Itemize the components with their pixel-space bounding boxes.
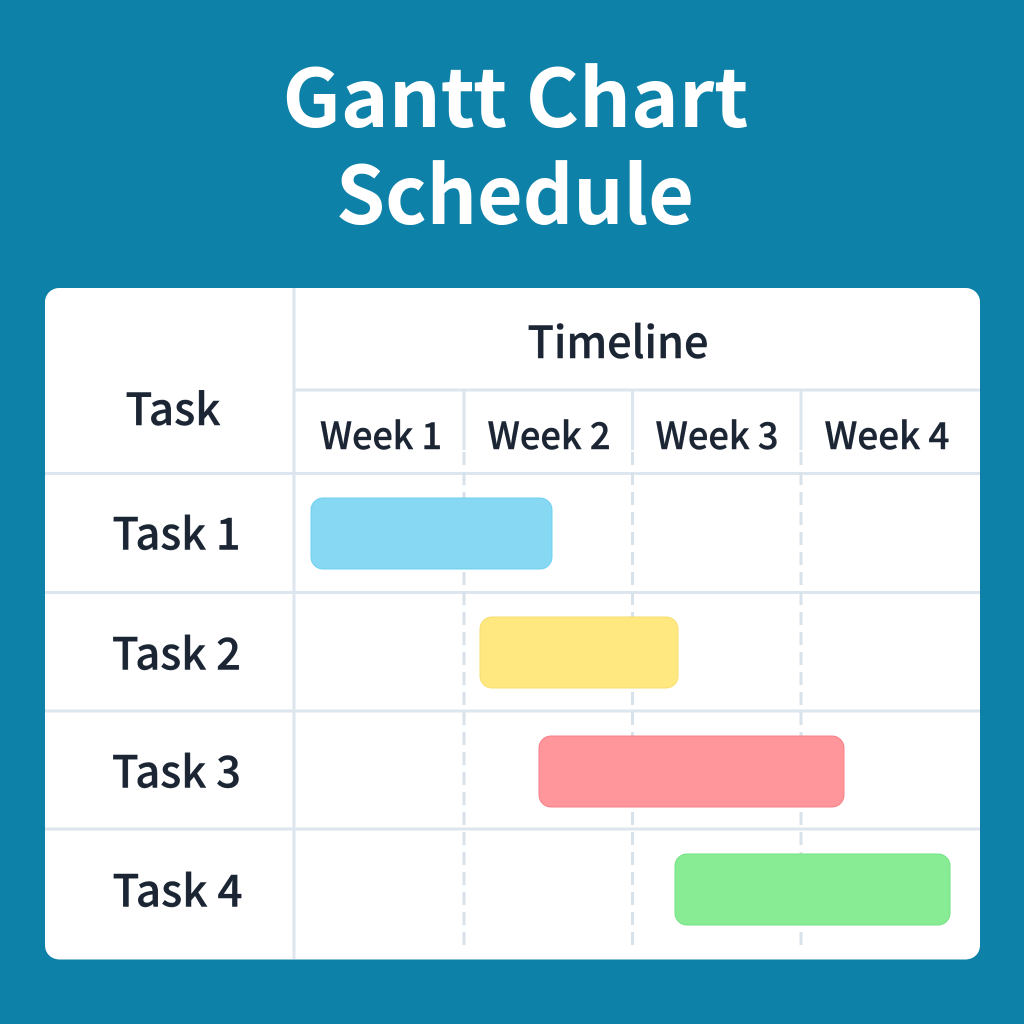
- week labels: Week 4: [824, 406, 950, 460]
- panel: gantt table: [45, 288, 980, 960]
- bar: task 1: [311, 498, 552, 569]
- task labels: Task 2: [112, 618, 241, 682]
- task labels: Task 4: [112, 856, 242, 920]
- title: Schedule: [336, 132, 694, 248]
- bar: task 4: [675, 854, 950, 925]
- bar: task 3: [539, 736, 844, 807]
- task labels: Task 1: [112, 498, 240, 562]
- task labels: [112, 498, 242, 920]
- week labels: Week 3: [656, 406, 778, 460]
- task labels: Task 3: [112, 736, 241, 800]
- title: [282, 35, 748, 248]
- bar: task 2: [480, 617, 678, 688]
- week labels: [320, 406, 950, 460]
- heading: timeline: Timeline: [528, 307, 708, 371]
- title: Gantt Chart: [282, 35, 748, 151]
- week labels: Week 1: [320, 406, 442, 460]
- heading: task column: Task: [126, 374, 220, 438]
- week labels: Week 2: [488, 406, 610, 460]
